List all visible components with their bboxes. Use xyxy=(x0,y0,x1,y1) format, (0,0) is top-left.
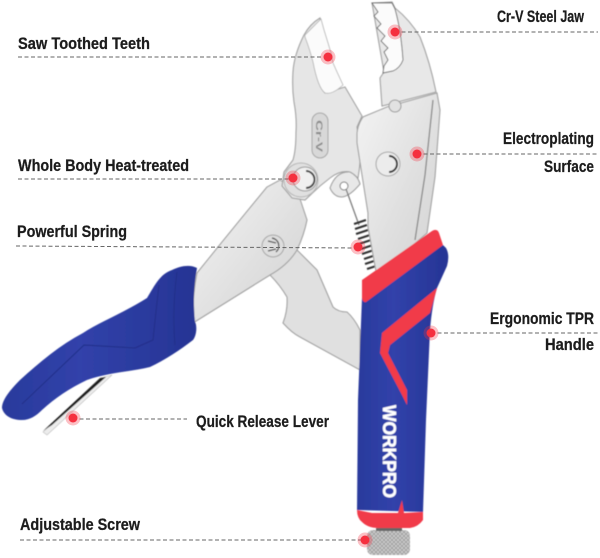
lower lobe of movable arm xyxy=(270,250,360,370)
label: Saw Toothed Teeth: Saw Toothed Teeth xyxy=(18,35,150,53)
Cr-V stamp xyxy=(312,113,328,158)
locking jaw body xyxy=(357,93,440,277)
red chevron stripe xyxy=(380,288,437,405)
spring xyxy=(346,189,379,269)
label: Powerful Spring: Powerful Spring xyxy=(17,223,127,241)
red collar xyxy=(362,230,443,302)
rivet on arm xyxy=(262,235,284,257)
right handle grip xyxy=(357,230,448,528)
movable handle arm xyxy=(193,180,307,323)
label: Quick Release Lever: Quick Release Lever xyxy=(196,413,329,431)
label: Whole Body Heat-treated: Whole Body Heat-treated xyxy=(18,157,189,175)
front pivot joint xyxy=(284,163,318,197)
label: Handle: Handle xyxy=(545,336,594,354)
spring hook plate xyxy=(330,172,360,197)
blue left grip xyxy=(2,266,197,420)
label: Adjustable Screw: Adjustable Screw xyxy=(20,516,140,534)
plier illustration xyxy=(2,2,448,555)
upper right jaw xyxy=(372,2,436,106)
Cr-V stamp: Cr-V xyxy=(314,120,324,152)
release lever xyxy=(43,375,112,435)
marker dots xyxy=(66,24,438,548)
upper left jaw xyxy=(282,18,362,200)
body rivet xyxy=(376,152,400,176)
red end cap xyxy=(357,500,423,528)
adjustment knob xyxy=(367,528,410,555)
small rivet xyxy=(389,100,401,112)
saw teeth xyxy=(305,19,343,93)
brand label: WORKPRO xyxy=(379,405,399,498)
